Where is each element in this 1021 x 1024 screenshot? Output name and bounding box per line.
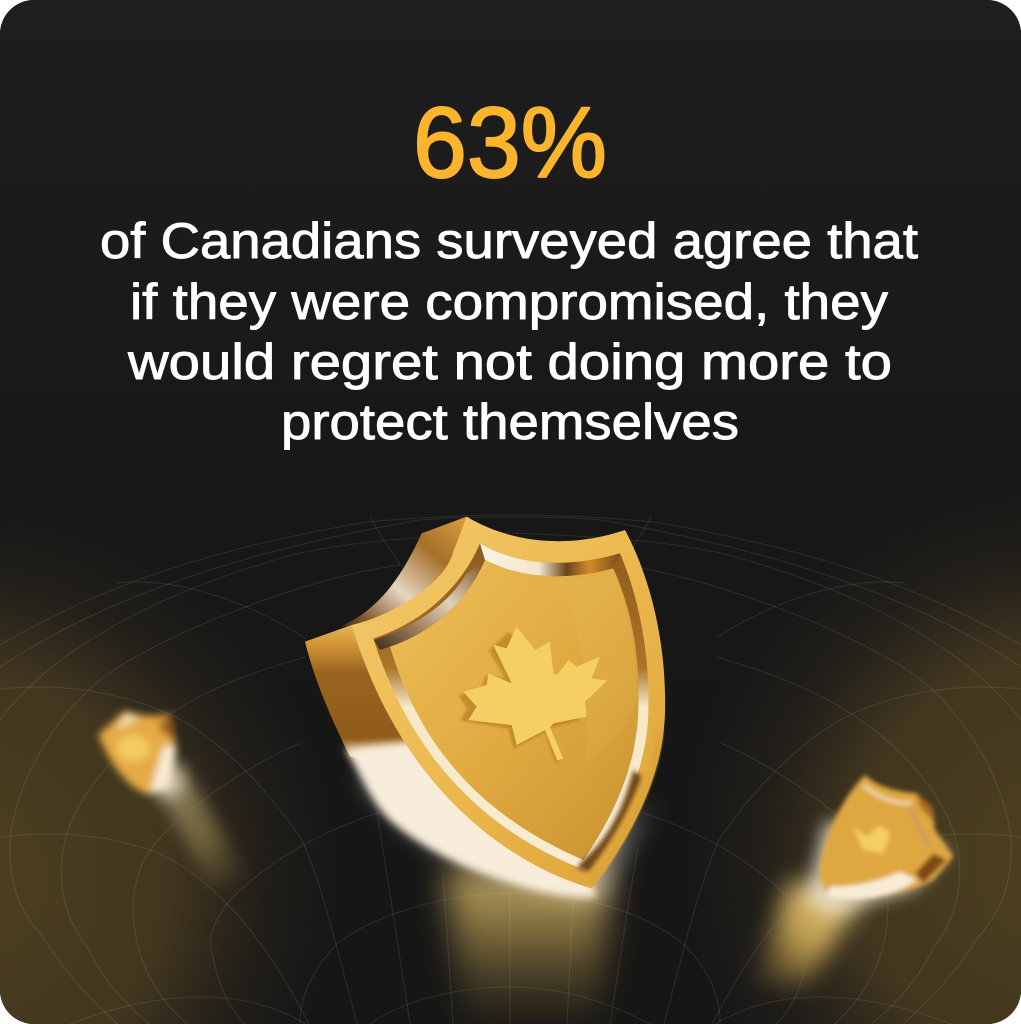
body statement: would regret not doing more to [127,334,892,390]
glow [805,820,950,915]
small shield body [820,775,953,899]
recess dark corner [577,770,642,872]
recess left streak [374,560,485,650]
shield halo [360,770,650,900]
shield cream fade [345,740,597,897]
rim lower edge [592,730,659,883]
glow [154,762,182,798]
left small shield with trail [98,711,250,885]
side glow: left [0,500,340,1024]
side glow: right [680,480,1021,1024]
small shield body [98,711,175,794]
icon: maple leaf [463,627,607,761]
globe grid lines [0,515,1021,1024]
trail [755,880,865,985]
icon: maple leaf shadow [459,632,582,764]
body statement: if they were compromised, they [130,274,888,330]
heading: 63%: 63% [413,87,607,199]
body statement: of Canadians surveyed agree that [100,213,918,269]
plate highlight [560,568,637,763]
shield back layer [340,517,467,627]
shield front rim [352,517,665,888]
shield left side [305,625,420,773]
recess top band [480,543,620,576]
right small shield with trail [755,775,953,985]
light beam below main shield [445,870,610,1024]
shield plate [390,560,639,860]
body statement: protect themselves [281,394,739,450]
trail [155,765,250,885]
main shield [305,517,665,900]
shield inner recess [373,543,649,870]
body statement [100,213,918,450]
